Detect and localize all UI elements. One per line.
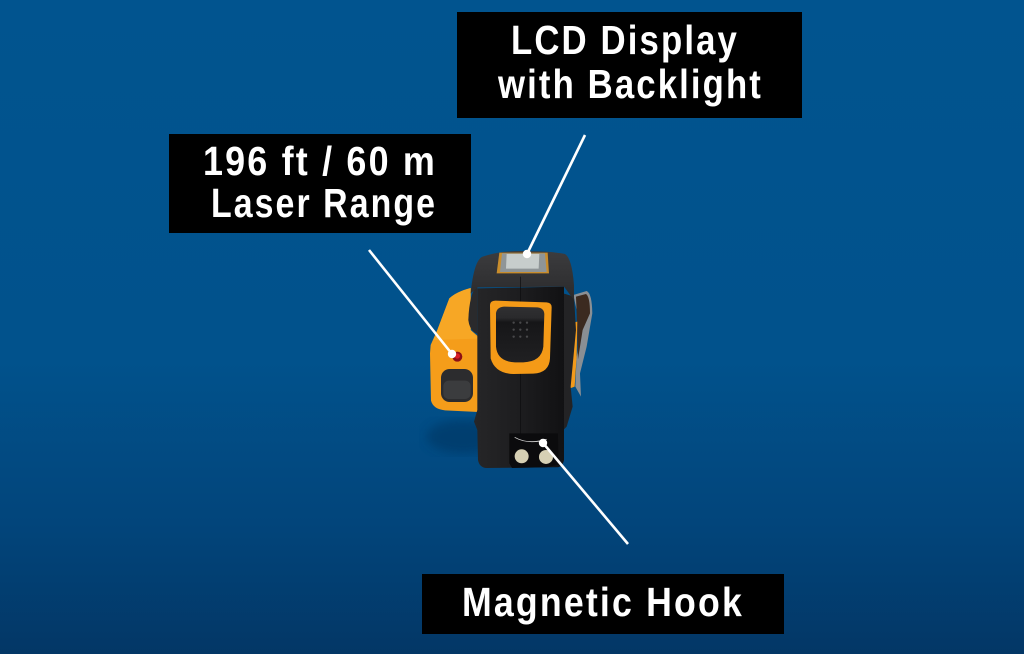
callout line: LCD display [523, 135, 585, 258]
callout line: magnetic hook [539, 439, 628, 544]
red laser emitter [452, 352, 462, 362]
magnetic hook [509, 433, 559, 468]
top cap [471, 251, 574, 300]
label: laser range: Laser Range [211, 180, 437, 226]
label: laser range: 196 ft / 60 m [203, 138, 437, 184]
belt clip [570, 291, 592, 397]
right rear bump [563, 293, 576, 430]
LCD display [497, 253, 549, 273]
label: LCD display with backlight: LCD Display [511, 17, 739, 63]
label: magnetic hook: Magnetic Hook [462, 579, 744, 625]
shadow [427, 420, 500, 453]
label: LCD display with backlight [457, 12, 802, 118]
product: laser tape measure [427, 251, 592, 468]
label: laser range [169, 134, 471, 233]
orange button surround [490, 301, 552, 374]
orange laser housing [430, 288, 478, 412]
callout line: laser range [369, 250, 456, 358]
label: magnetic hook [422, 574, 784, 634]
tape body [468, 251, 576, 468]
label: LCD display with backlight: with Backlight [497, 61, 763, 107]
lock button [496, 307, 544, 362]
laser window [441, 369, 473, 402]
